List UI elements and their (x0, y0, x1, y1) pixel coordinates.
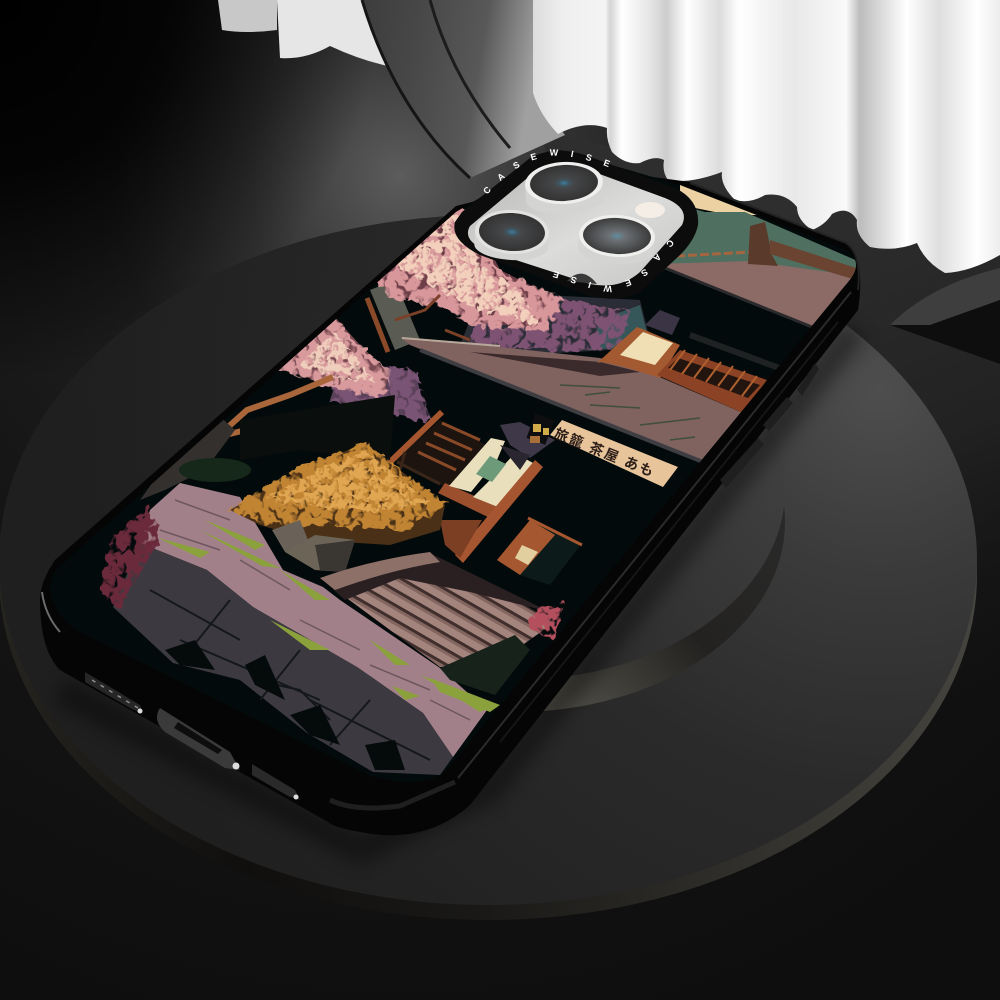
camera glass (468, 165, 684, 286)
small shrine box (497, 518, 582, 585)
stone lanterns (272, 520, 355, 572)
large disc (0, 215, 977, 920)
flash (635, 202, 665, 218)
main roof (400, 337, 743, 462)
stand wedge right (890, 268, 1000, 364)
phone artwork (100, 150, 856, 775)
moss patches (158, 520, 495, 712)
phone case body (40, 170, 860, 835)
sensor (567, 274, 597, 284)
sunlit stone path (140, 483, 487, 757)
art base (473, 150, 652, 202)
sky and hill (671, 185, 856, 288)
phone shadow (60, 330, 855, 850)
green hanging tag (476, 456, 506, 482)
curtain right (533, 0, 1000, 273)
brand text bottom: CASEWISE (552, 240, 674, 292)
black stand arcs (362, 0, 565, 178)
lantern (526, 413, 554, 445)
small raised disc (245, 300, 785, 712)
door panels (438, 422, 555, 563)
path cracks (160, 500, 470, 720)
curtain left (218, 0, 388, 66)
pink flowers (100, 505, 565, 640)
lens top (524, 160, 605, 216)
orange bush (228, 442, 448, 545)
shop sign (550, 420, 678, 487)
shop sign: 旅籠 茶屋 あも (552, 425, 658, 480)
upper roof (664, 222, 856, 328)
lens left (474, 208, 550, 262)
left lattice (390, 412, 490, 490)
side buttons (720, 363, 819, 488)
camera surround (454, 149, 698, 299)
stone stairs (320, 552, 555, 712)
brand text top: CASEWISE (484, 149, 610, 194)
cherry tree lower (217, 315, 430, 437)
upper window and balcony (597, 310, 790, 413)
left dark wall and lantern posts (140, 395, 395, 500)
port speaker right (252, 764, 300, 800)
shaded stone path (113, 543, 453, 775)
cherry tree upper (367, 205, 650, 355)
lens right (578, 213, 656, 266)
charging port (157, 708, 240, 770)
charging port speaker left (85, 672, 143, 714)
